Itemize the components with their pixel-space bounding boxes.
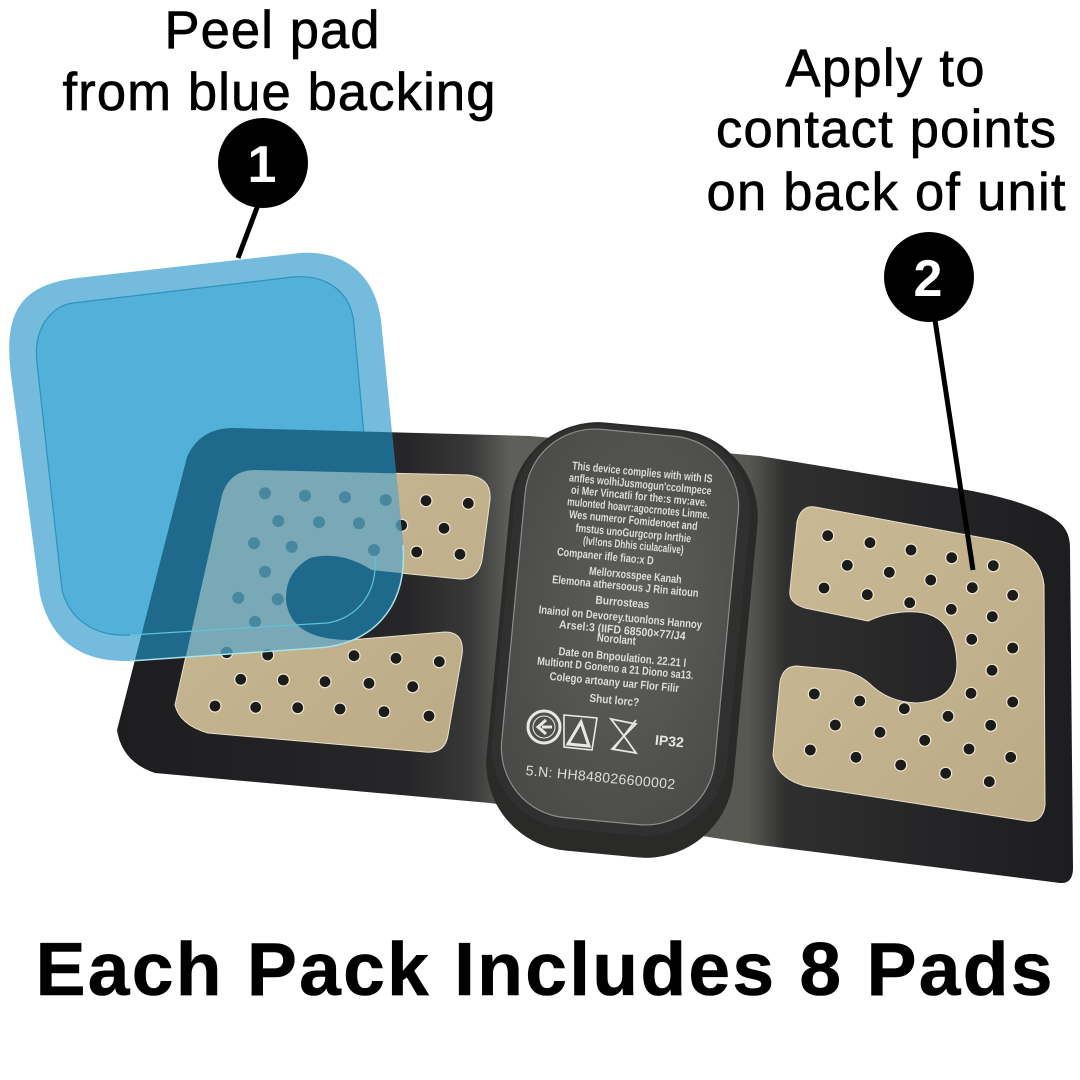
contact pad: left bbox=[175, 470, 490, 752]
module regulatory text: Wes numeror Fomidenoet and bbox=[569, 509, 698, 533]
module regulatory text: Date on Bnpoulation. 22.21 l bbox=[558, 646, 687, 670]
heading: step 2 instruction: on back of unit bbox=[706, 163, 1066, 222]
module regulatory text: mulonted hoavr:agocrnotes Linme. bbox=[567, 496, 710, 522]
module regulatory text: Mellorxosspee Kanah bbox=[588, 566, 682, 586]
badge: step 2: 2 bbox=[914, 250, 942, 308]
device body band bbox=[117, 428, 1073, 883]
module regulatory text: anfles wolhiJusmogun'ccolmpece bbox=[569, 472, 712, 498]
module regulatory text: Elemona athersoous J Rin aitoun bbox=[552, 574, 699, 600]
heading: step 1 instruction bbox=[62, 1, 496, 122]
icon: crossed hourglass bbox=[611, 719, 636, 753]
label: IP32: IP32 bbox=[654, 732, 685, 750]
badge: step 1: 1 bbox=[248, 136, 276, 194]
module regulatory text: Companer ifle fiao:x D bbox=[556, 546, 654, 568]
heading: step 1 instruction: Peel pad bbox=[164, 1, 380, 60]
module regulatory text: Multiont D Goneno a 21 Diono sa13. bbox=[537, 656, 694, 682]
leader line: step 1 bbox=[238, 205, 258, 258]
footer headline: Each Pack Includes 8 Pads bbox=[36, 927, 1052, 1011]
icon: certification circle bbox=[528, 711, 560, 743]
heading: step 1 instruction: from blue backing bbox=[62, 63, 496, 122]
badge: step 2 bbox=[884, 232, 974, 322]
contact pad: right bbox=[773, 507, 1045, 821]
badge: step 1 bbox=[218, 118, 308, 208]
module regulatory text bbox=[537, 460, 713, 709]
centre module bbox=[478, 414, 766, 866]
module regulatory text: Arsel:3 (IIFD 68500×77/J4 bbox=[558, 619, 687, 643]
module regulatory text: Burrosteas bbox=[595, 594, 650, 612]
module regulatory text: This device complies with with IS bbox=[572, 460, 713, 486]
module regulatory text: (Ivl!ons Dhhis ciulacalive) bbox=[582, 535, 684, 557]
module regulatory text: Shut lorc? bbox=[589, 693, 640, 709]
module regulatory text: Colego artoany uar Flor Filir bbox=[549, 671, 680, 695]
device: massager unit back bbox=[117, 414, 1073, 883]
module regulatory text: oi Mer Vincatli for the:s mv:ave. bbox=[571, 485, 708, 509]
icon: triangle in square bbox=[564, 715, 597, 750]
module regulatory text: fmstus unoGurgcorp Inrthie bbox=[575, 523, 692, 545]
device seen through the pad bbox=[130, 428, 403, 660]
module regulatory text: Norolant bbox=[596, 632, 636, 648]
heading: step 2 instruction: contact points bbox=[716, 100, 1056, 159]
label: serial number: 5.N: HH848026600002 bbox=[525, 762, 676, 792]
heading: step 2 instruction: Apply to bbox=[786, 39, 984, 98]
heading: step 2 instruction bbox=[706, 39, 1066, 222]
leader line: step 2 bbox=[935, 320, 973, 570]
gel pad on blue backing bbox=[9, 252, 404, 662]
module regulatory text: Inainol on Devorey.tuonlons Hannoy bbox=[538, 604, 703, 632]
